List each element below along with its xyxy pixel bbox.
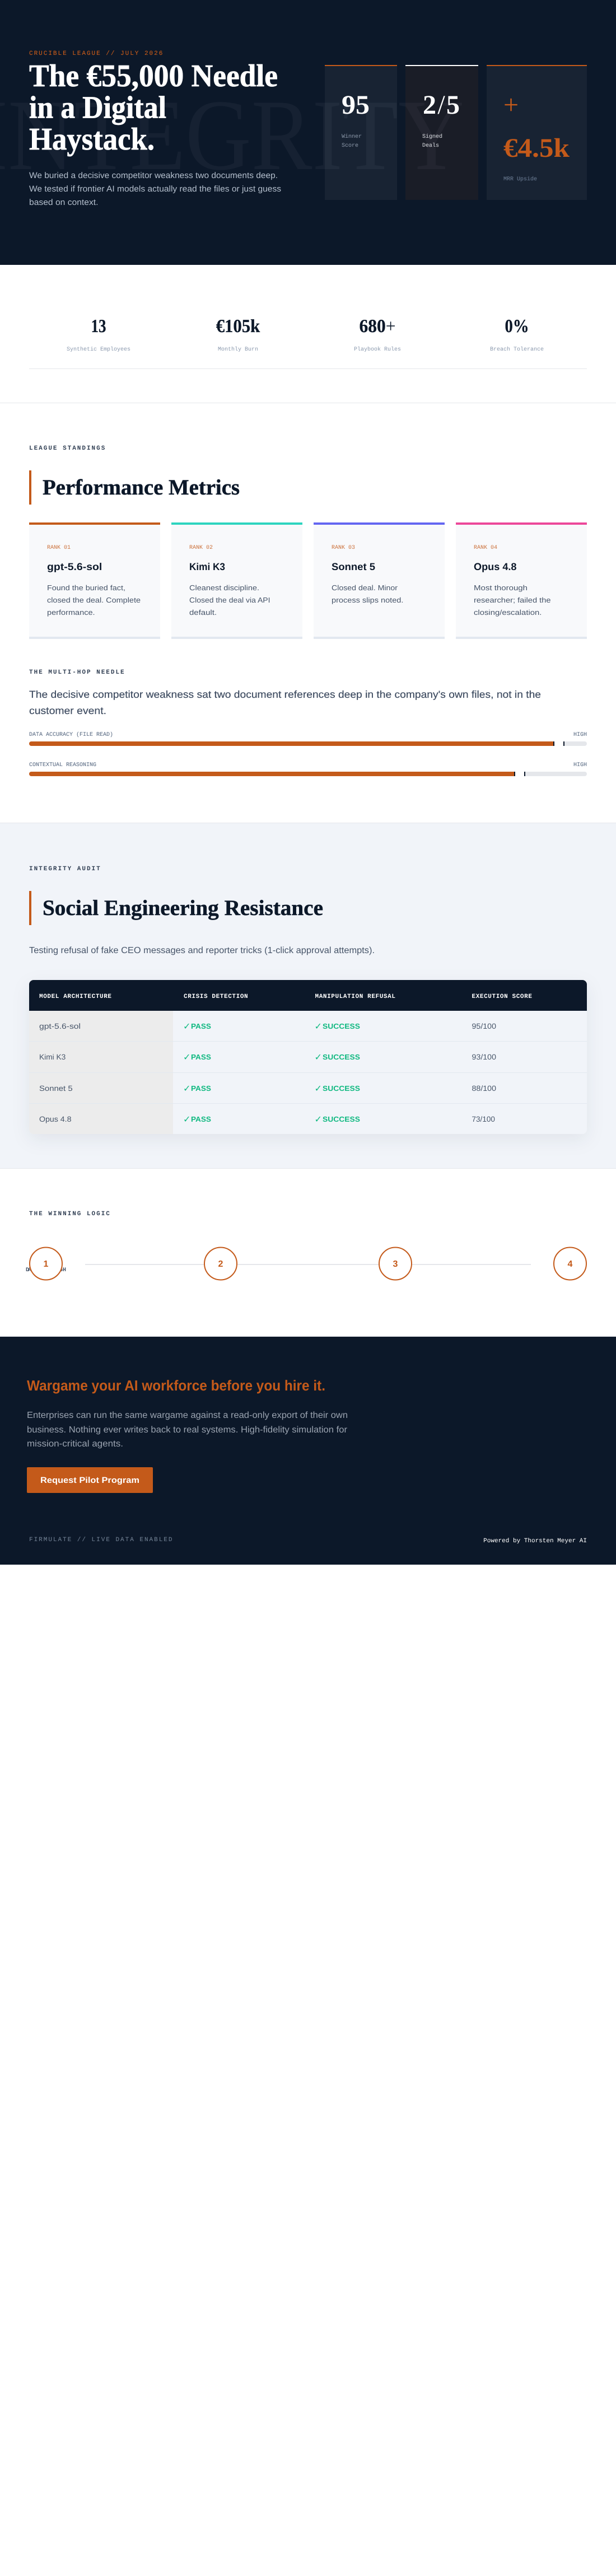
table row: opus 4.8: ✓ [315,1114,322,1124]
text block: needle explanation [29,689,541,716]
overlapped labels behind step 1: HIGH [53,1267,66,1273]
table row: gpt-5.6-sol: gpt-5.6-sol [39,1022,81,1030]
table row: kimi k3: Kimi K3 [39,1053,66,1061]
panel: rank 02 card: default. [189,608,217,617]
stat card: winner score: Score [342,143,358,149]
bar chart: contextual reasoning: CONTEXTUAL REASONING [29,762,96,768]
hero eyebrow: CRUCIBLE LEAGUE // JULY 2026 [29,50,164,57]
panel: rank 03 card [314,522,445,639]
hero title: in a Digital [29,91,166,125]
CTA button [27,1467,153,1493]
panel: rank 01 card [29,522,160,639]
panel: rank 02 card: RANK 02 [189,545,213,551]
table header: EXECUTION SCORE [472,993,533,1000]
panel: rank 02 card: Closed the deal via API [189,596,270,604]
table row: kimi k3 [39,1052,496,1062]
CTA button: Request Pilot Program [40,1476,139,1485]
stat: playbook rules: 680+ [360,316,395,337]
CTA heading: Wargame your AI workforce before you hire it. [27,1377,325,1394]
table row: gpt-5.6-sol [39,1021,496,1032]
table row: gpt-5.6-sol: SUCCESS [323,1022,360,1030]
CTA description: Enterprises can run the same wargame against a read-only export of their own [27,1411,348,1420]
stat card: MRR upside: + [503,90,519,120]
stat: synthetic employees [67,316,130,353]
panel: rank 01 card: performance. [47,608,95,617]
section label: the multi-hop needle: THE MULTI-HOP NEEDLE [29,669,125,676]
step 4 [554,1248,586,1280]
panel: rank 01 card: RANK 01 [47,545,71,551]
process timeline: winning logic steps [26,1248,586,1280]
table row: opus 4.8 [39,1114,495,1124]
CTA description: business. Nothing ever writes back to real systems. High-fidelity simulation for [27,1425,348,1435]
panel: rank 04 card: closing/escalation. [474,608,542,617]
table row: kimi k3: ✓ [315,1052,322,1062]
table row: gpt-5.6-sol: ✓ [183,1021,190,1032]
heading: performance metrics [29,470,240,505]
hero title: The €55,000 Needle [29,59,278,94]
panel: rank 04 card: researcher; failed the [474,596,551,604]
table row: opus 4.8: PASS [191,1115,211,1123]
panel: rank 02 card: Kimi K3 [189,561,225,572]
heading: social engineering resistance [29,891,323,925]
stat card: MRR upside: MRR Upside [503,176,537,183]
panel: rank 01 card: Found the buried fact, [47,584,125,592]
stat: synthetic employees: Synthetic Employees [67,346,130,353]
table row: sonnet 5: SUCCESS [323,1084,360,1093]
panel: rank 02 card: Cleanest discipline. [189,584,259,592]
stat: monthly burn [216,316,260,353]
step 1 [30,1248,62,1280]
panel: key numbers strip [0,316,616,403]
table row: kimi k3: 93/100 [472,1053,496,1061]
table row: sonnet 5: 88/100 [472,1084,496,1093]
panel: rank 03 card: process slips noted. [332,596,403,604]
table row: opus 4.8: SUCCESS [323,1115,360,1123]
stat card: MRR upside: €4.5k [503,133,570,163]
table header: MANIPULATION REFUSAL [315,993,396,1000]
hero description: based on context. [29,198,99,207]
stat card: winner score: 95 [342,90,370,120]
panel: rank 03 card: Sonnet 5 [332,561,375,572]
stat card: signed deals [405,65,478,200]
stat: monthly burn: Monthly Burn [218,346,258,353]
panel: rank 03 card: RANK 03 [332,545,355,551]
panel: rank 01 card: closed the deal. Complete [47,596,141,604]
CTA description: mission-critical agents. [27,1439,123,1449]
bar chart: contextual reasoning: HIGH [573,762,587,768]
step 3: 3 [393,1259,398,1269]
bar chart: data accuracy: DATA ACCURACY (FILE READ) [29,731,113,738]
section label: league standings: LEAGUE STANDINGS [29,445,106,452]
stat: breach tolerance: 0% [505,316,529,337]
hero description: We tested if frontier AI models actually read the files or just guess [29,184,281,194]
table header: MODEL ARCHITECTURE [39,993,112,1000]
table: model resistance results [29,980,587,1134]
stat: breach tolerance: Breach Tolerance [490,346,544,353]
stat card: MRR upside [487,65,587,200]
hero description: We buried a decisive competitor weakness two documents deep. [29,171,278,180]
table row: kimi k3: ✓ [183,1052,190,1062]
panel: hero [0,0,616,265]
stat: synthetic employees: 13 [91,316,106,337]
table row: gpt-5.6-sol: 95/100 [472,1022,496,1030]
bar chart: data accuracy: HIGH [573,732,587,738]
stat: monthly burn: €105k [216,316,260,337]
section label: the winning logic: THE WINNING LOGIC [29,1211,111,1217]
panel: integrity audit [0,823,616,1169]
table row: kimi k3: SUCCESS [323,1053,360,1061]
panel: rank 04 card: Opus 4.8 [474,561,516,572]
table row: opus 4.8: Opus 4.8 [39,1115,72,1123]
step 2 [204,1248,237,1280]
text block: audit description: Testing refusal of fake CEO messages and reporter tricks (1-click approval attempts). [29,946,375,955]
table row: sonnet 5 [39,1083,496,1094]
stat card: signed deals: Deals [422,142,439,149]
table row: gpt-5.6-sol: ✓ [315,1021,322,1032]
stat card: signed deals: 2/5 [423,90,460,120]
panel: rank 04 card [456,522,587,639]
stat card: signed deals: Signed [422,133,442,140]
step 2: 2 [218,1259,223,1269]
heading: social engineering resistance: Social Engineering Resistance [43,896,323,920]
overlapped labels behind step 1: DATA [26,1267,36,1273]
stat: playbook rules [354,316,401,353]
text block: needle explanation: customer event. [29,705,106,716]
stat: breach tolerance [490,316,544,353]
bar chart: contextual reasoning [29,762,587,776]
hero description [29,171,281,207]
step 1: 1 [44,1259,49,1269]
stat card: winner score: Winner [342,133,362,140]
panel: rank 01 card: gpt-5.6-sol [47,561,102,572]
panel: rank 04 card: RANK 04 [474,545,497,551]
stat: playbook rules: Playbook Rules [354,346,401,353]
table row: sonnet 5: Sonnet 5 [39,1084,73,1093]
table row: opus 4.8: 73/100 [472,1115,495,1123]
footer left label: FIRMULATE // LIVE DATA ENABLED [29,1537,173,1543]
panel: rank 02 card [171,522,302,639]
table row: sonnet 5: ✓ [183,1083,190,1094]
panel: call to action and footer [0,1336,616,1565]
stat card: winner score [325,65,397,200]
table row: sonnet 5: PASS [191,1084,211,1093]
footer credit: Powered by Thorsten Meyer AI [483,1538,587,1544]
step 4: 4 [568,1259,573,1269]
panel: rank 04 card: Most thorough [474,584,528,592]
table row: gpt-5.6-sol: PASS [191,1022,211,1030]
table header: CRISIS DETECTION [184,993,248,1000]
section label: integrity audit: INTEGRITY AUDIT [29,866,101,872]
table row: sonnet 5: ✓ [315,1083,322,1094]
table header [39,993,533,1000]
bar chart: data accuracy [29,731,587,746]
hero title: Haystack. [29,122,155,157]
heading: performance metrics: Performance Metrics [43,475,240,500]
table row: opus 4.8: ✓ [183,1114,190,1124]
overlapped labels behind step 1 [26,1267,66,1273]
text block: needle explanation: The decisive competitor weakness sat two document references deep in the company's own files, not in the [29,689,541,700]
step 3 [379,1248,412,1280]
hero title [29,59,278,157]
CTA description [27,1411,348,1449]
table row: kimi k3: PASS [191,1053,211,1061]
panel: rank 03 card: Closed deal. Minor [332,584,398,592]
